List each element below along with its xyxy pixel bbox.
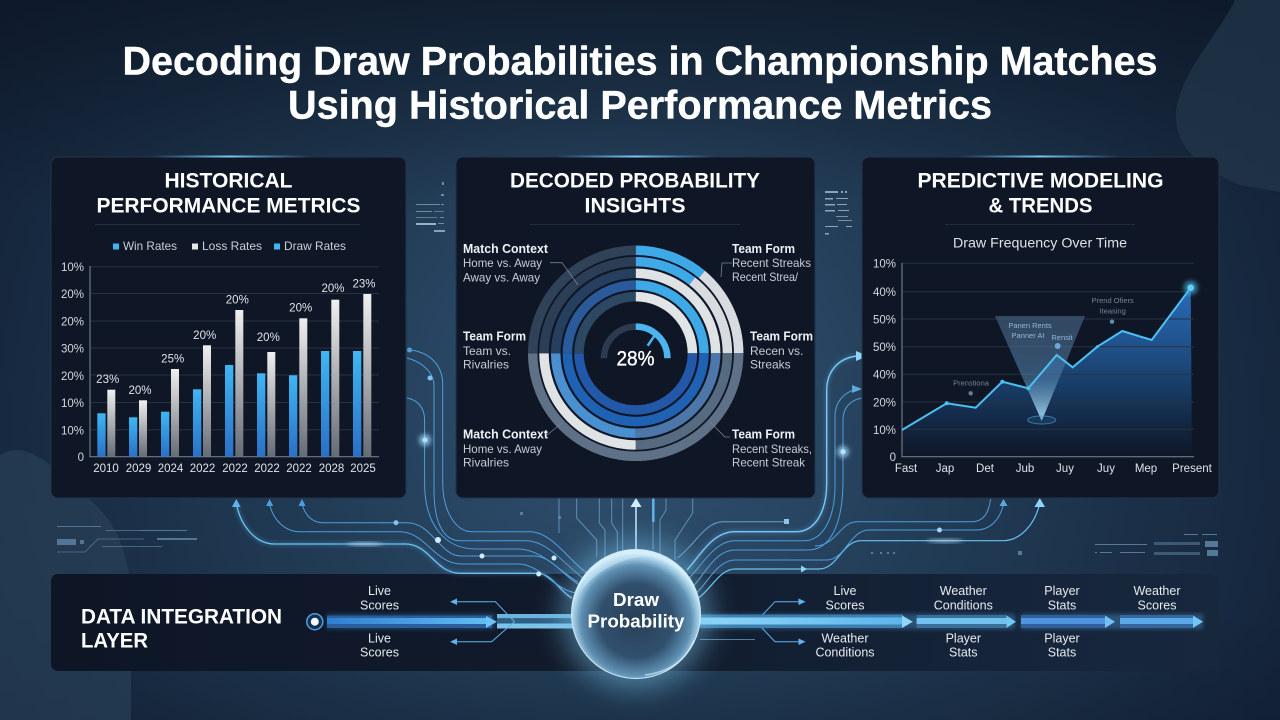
- flow labels: Weather: [1133, 584, 1181, 598]
- bar chart: rates by year: 10%: [61, 398, 84, 410]
- source node: [307, 614, 323, 630]
- flow labels: Live: [834, 584, 857, 598]
- radial ring chart: [533, 250, 739, 456]
- bar chart: rates by year: [61, 262, 379, 475]
- bar chart: rates by year: 20%: [289, 302, 312, 314]
- line chart: draw frequency over time: Fast: [895, 463, 918, 475]
- flow labels: Stats: [949, 646, 978, 660]
- left flow arrow: [327, 614, 577, 629]
- panel: data integration layer: [51, 574, 1219, 671]
- legend: Win Rates: [123, 239, 177, 253]
- layer heading: LAYER: [81, 630, 148, 653]
- circuit lines: sphere up to decoded insights panel: [559, 498, 693, 562]
- label: team form, middle left: Team Form: [463, 330, 526, 344]
- line chart: draw frequency over time: 40%: [873, 370, 896, 382]
- flow labels: Stats: [1048, 598, 1076, 612]
- heading: [96, 170, 360, 218]
- line chart: draw frequency over time: Det: [976, 463, 995, 475]
- line chart: draw frequency over time: Juy: [1056, 463, 1074, 475]
- callout funnel: Panner AI: [1012, 331, 1044, 340]
- bar chart: rates by year: 2029: [126, 463, 151, 475]
- line chart: draw frequency over time: Jap: [936, 463, 954, 475]
- connectors: sphere to predictive modeling panel: [677, 351, 1045, 598]
- label: match context, top left: [463, 242, 549, 284]
- panel: decoded probability insights: [456, 156, 815, 498]
- legend: [113, 239, 346, 253]
- line chart: draw frequency over time: Juy: [1097, 463, 1115, 475]
- decorative data ticks: upper right: [825, 191, 852, 234]
- bar chart: rates by year: 20%: [193, 330, 216, 342]
- bar chart: rates by year: 20%: [128, 385, 152, 397]
- flow labels: Stats: [1048, 646, 1076, 660]
- callout funnel: [995, 316, 1085, 424]
- label: match context, top left: Match Context: [463, 242, 549, 256]
- flow labels: Player: [946, 632, 981, 646]
- label: team form, middle left: Team vs.: [463, 344, 511, 358]
- label: team form, bottom right: [732, 427, 812, 470]
- bar chart: rates by year: 2022: [190, 463, 215, 475]
- annotations: Prend Ofiers: [1092, 296, 1134, 305]
- label: team form, bottom right: Team Form: [732, 427, 795, 441]
- label: match context, bottom left: [463, 427, 549, 470]
- flow labels: Live: [368, 632, 391, 646]
- label: match context, bottom left: Match Context: [463, 427, 549, 441]
- heading: INSIGHTS: [584, 194, 686, 218]
- bar chart: rates by year: 2022: [286, 463, 312, 475]
- flow labels: Weather: [940, 584, 987, 598]
- flow labels: Scores: [1138, 598, 1176, 612]
- annotations: [953, 296, 1134, 395]
- layer heading: [81, 605, 282, 653]
- heading: PREDICTIVE MODELING: [918, 170, 1164, 192]
- bar chart: rates by year: 10%: [61, 426, 84, 438]
- callout funnel: Panen Rents: [1008, 321, 1052, 330]
- bar chart: rates by year: 2028: [319, 463, 344, 475]
- decorative data ticks: upper left: [416, 182, 445, 232]
- bar chart: rates by year: 30%: [61, 344, 84, 356]
- bar chart: rates by year: 20%: [226, 294, 249, 306]
- label: match context, bottom left: Home vs. Away: [463, 442, 542, 456]
- bar chart: rates by year: 10%: [61, 262, 84, 274]
- line chart: draw frequency over time: Present: [1172, 463, 1213, 475]
- bar chart: rates by year: 0: [78, 452, 84, 464]
- bar chart: rates by year: 23%: [96, 374, 119, 386]
- label: team form, middle left: Rivalries: [463, 358, 509, 372]
- label: team form, middle right: [750, 330, 813, 372]
- legend: Loss Rates: [202, 239, 262, 253]
- right branching arrows: [700, 598, 806, 645]
- line chart: draw frequency over time: 40%: [873, 287, 896, 299]
- title: [122, 40, 1158, 128]
- bar chart: rates by year: 2010: [93, 463, 119, 475]
- bar chart: rates by year: 2022: [254, 463, 280, 475]
- bar chart: rates by year: 2024: [158, 463, 184, 475]
- annotations: Prenstiona: [953, 378, 990, 388]
- central sphere: draw probability: Probability: [588, 612, 684, 632]
- flow labels: Player: [1044, 632, 1080, 646]
- connectors: sphere to historical metrics panel: [232, 348, 587, 598]
- line chart: draw frequency over time: 50%: [873, 342, 896, 354]
- annotations: Iteasing: [1100, 306, 1126, 316]
- line chart: draw frequency over time: 20%: [873, 398, 896, 410]
- flow labels: Scores: [826, 598, 864, 612]
- panel: predictive modeling and trends: [862, 156, 1219, 498]
- label: match context, bottom left: Rivalries: [463, 456, 509, 470]
- label: team form, middle left: [463, 330, 526, 372]
- bar chart: rates by year: 20%: [61, 371, 84, 383]
- decorative data ticks: lower left: [57, 526, 197, 552]
- line chart: draw frequency over time: Mep: [1135, 463, 1157, 475]
- layer heading: DATA INTEGRATION: [81, 605, 282, 628]
- label: team form, middle right: Team Form: [750, 330, 813, 344]
- line chart: draw frequency over time: 10%: [873, 258, 896, 270]
- label: team form, middle right: Streaks: [750, 358, 791, 372]
- heading: [510, 170, 760, 218]
- line chart: draw frequency over time: 50%: [873, 314, 896, 326]
- flow labels: Conditions: [934, 598, 993, 612]
- label: match context, top left: Home vs. Away: [463, 256, 542, 270]
- label: team form, middle right: Recen vs.: [750, 344, 803, 358]
- leader lines: [546, 263, 732, 437]
- heading: & TRENDS: [988, 194, 1092, 218]
- label: team form, bottom right: Recent Streaks,: [732, 442, 812, 456]
- bar chart: rates by year: 20%: [257, 332, 280, 344]
- central sphere: draw probability: Draw: [613, 590, 660, 610]
- decorative data ticks: lower right: [520, 512, 1218, 556]
- flow labels: Live: [368, 584, 391, 598]
- panel: historical performance metrics: [51, 156, 406, 498]
- label: team form, bottom right: Recent Streak: [732, 456, 806, 470]
- flow labels: Conditions: [815, 646, 875, 660]
- flow labels: Scores: [360, 646, 399, 660]
- bar chart: rates by year: 20%: [61, 316, 84, 328]
- chart title: Draw Frequency Over Time: [953, 234, 1127, 250]
- label: team form, top right: [732, 242, 811, 284]
- center gauge: 28%: [604, 327, 667, 371]
- title: Decoding Draw Probabilities in Championship Matches: [122, 40, 1158, 84]
- bar chart: rates by year: 20%: [321, 283, 345, 295]
- bar chart: rates by year: 20%: [61, 289, 84, 301]
- bar chart: rates by year: 2022: [222, 463, 248, 475]
- flow labels: [360, 584, 1181, 660]
- label: match context, top left: Away vs. Away: [463, 270, 540, 284]
- heading: DECODED PROBABILITY: [510, 170, 760, 192]
- label: team form, top right: Team Form: [732, 242, 795, 256]
- bar chart: rates by year: 2025: [350, 463, 376, 475]
- bar chart: rates by year: 23%: [352, 278, 376, 290]
- bar chart: rates by year: 25%: [161, 354, 184, 366]
- center gauge: 28%: 28%: [616, 348, 654, 371]
- line chart: draw frequency over time: 10%: [873, 425, 896, 437]
- legend: Draw Rates: [284, 239, 346, 253]
- line chart: draw frequency over time: Jub: [1016, 463, 1034, 475]
- heading: PERFORMANCE METRICS: [96, 194, 360, 218]
- line chart: draw frequency over time: [873, 258, 1213, 475]
- left branching arrows: [450, 598, 514, 645]
- label: team form, top right: Recent Strea/: [732, 270, 799, 284]
- heading: [918, 170, 1164, 218]
- label: team form, top right: Recent Streaks: [732, 256, 811, 270]
- line chart: draw frequency over time: 0: [890, 452, 896, 464]
- flow labels: Weather: [821, 632, 869, 646]
- heading: HISTORICAL: [164, 170, 293, 192]
- central sphere: draw probability: [562, 540, 710, 688]
- right flow arrows: [700, 614, 1203, 629]
- flow labels: Scores: [360, 598, 399, 612]
- title: Using Historical Performance Metrics: [288, 84, 992, 128]
- flow labels: Player: [1044, 584, 1080, 598]
- callout funnel: Rensit: [1051, 333, 1074, 342]
